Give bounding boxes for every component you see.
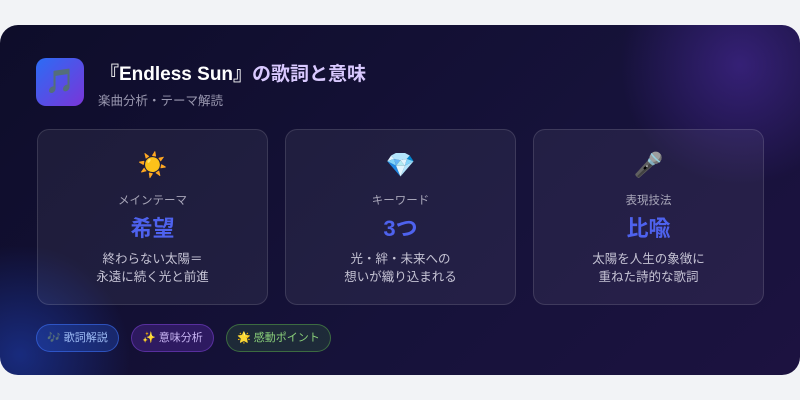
card: main theme: メインテーマ — [118, 195, 187, 207]
card: technique: 🎤 — [634, 152, 663, 179]
tag: emotion: 🌟 感動ポイント — [237, 332, 320, 344]
card: technique: 重ねた詩的な歌詞 — [598, 270, 698, 284]
card: keywords — [285, 129, 516, 305]
card: main theme: 希望 — [130, 216, 174, 241]
title: 『Endless Sun』の歌詞と意味 — [100, 64, 366, 85]
icon: music note: 🎵 — [45, 68, 75, 95]
tag: emotion — [226, 324, 331, 352]
card: main theme: ☀️ — [138, 152, 167, 179]
card: technique: 表現技法 — [626, 195, 672, 207]
tag: meaning — [131, 324, 214, 352]
card: keywords: 光・絆・未来への — [350, 252, 450, 266]
card: main theme: 永遠に続く光と前進 — [96, 270, 209, 284]
tag: meaning: ✨ 意味分析 — [142, 332, 203, 344]
card: keywords: 想いが織り込まれる — [344, 270, 457, 284]
card: keywords: キーワード — [372, 195, 429, 207]
card: main theme: 終わらない太陽＝ — [102, 252, 202, 266]
card: keywords: 💎 — [386, 152, 415, 179]
tag: lyrics — [36, 324, 119, 352]
card: technique — [533, 129, 764, 305]
subtitle: 楽曲分析・テーマ解読 — [98, 94, 223, 108]
card: technique: 太陽を人生の象徴に — [592, 252, 705, 266]
card: keywords: 3つ — [383, 216, 418, 241]
tag: lyrics: 🎶 歌詞解説 — [47, 332, 108, 344]
card: technique: 比喩 — [626, 216, 670, 241]
card: main theme — [37, 129, 268, 305]
icon: music note — [36, 58, 84, 106]
